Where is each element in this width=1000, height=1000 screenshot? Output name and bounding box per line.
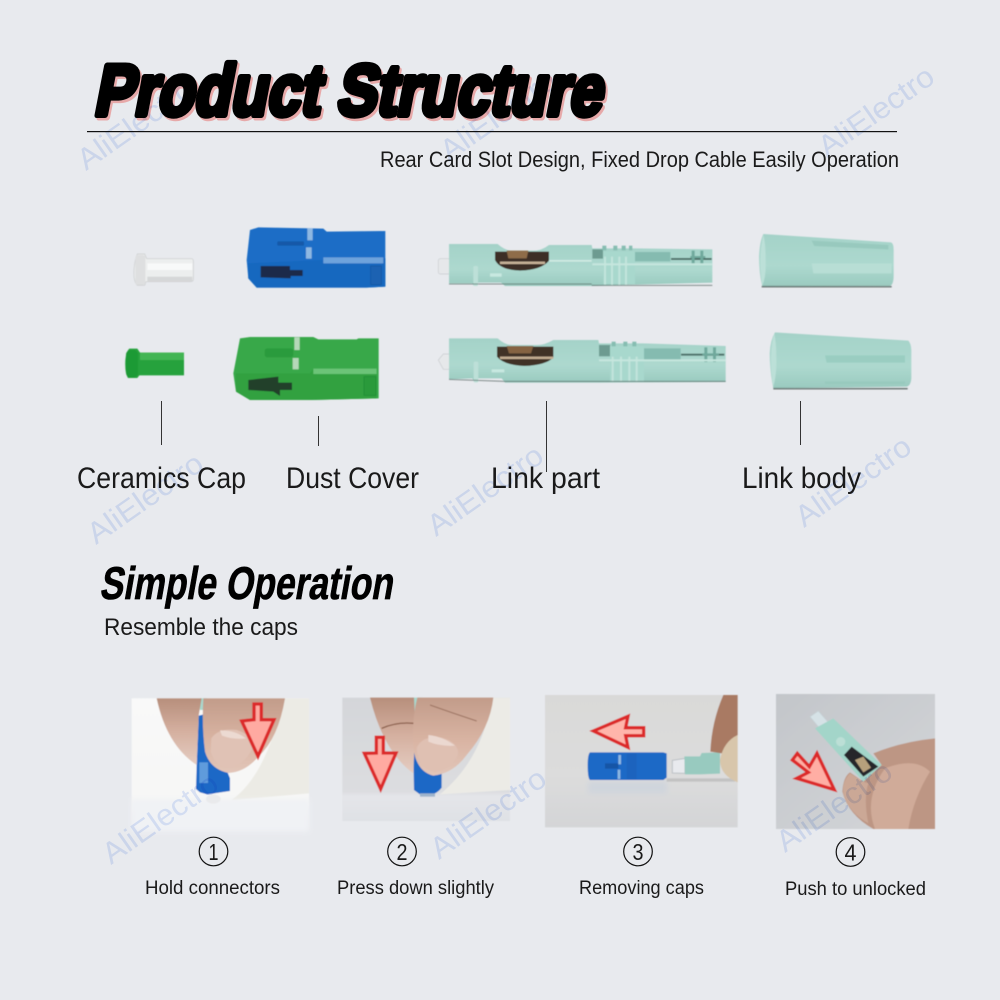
photo 2: press down slightly bbox=[342, 698, 510, 821]
watermarks: AliElectro bbox=[424, 762, 553, 866]
photo 1: hold connectors bbox=[132, 698, 309, 832]
title: Product Structure: Product Structure bbox=[92, 53, 616, 133]
heading: Simple Operation: Simple Operation bbox=[97, 557, 399, 609]
bottom link body bbox=[770, 332, 911, 389]
title: Product Structure: Product Structure bbox=[90, 51, 614, 131]
green dust cover bbox=[233, 337, 379, 400]
title underline bbox=[87, 131, 897, 132]
arrow: down-right bbox=[792, 753, 834, 790]
top link body bbox=[759, 234, 894, 287]
watermarks bbox=[71, 60, 941, 871]
step 4 number: 4 bbox=[844, 840, 857, 866]
watermarks: AliElectro bbox=[789, 430, 918, 534]
arrow: left bbox=[593, 716, 644, 747]
watermarks: AliElectro bbox=[770, 755, 899, 859]
parts: link parts and link bodies bbox=[438, 234, 911, 389]
blue dust cover bbox=[247, 227, 385, 288]
step 2 number bbox=[388, 837, 416, 866]
arrow: down bbox=[364, 737, 396, 789]
step 4 number bbox=[836, 838, 865, 866]
watermarks: AliElectro bbox=[812, 60, 941, 164]
step 1 number bbox=[199, 837, 228, 866]
white ceramics cap bbox=[134, 254, 193, 285]
caption: Press down slightly: Press down slightly bbox=[337, 877, 494, 899]
watermarks: AliElectro bbox=[71, 73, 200, 177]
photo 3: removing caps bbox=[545, 695, 738, 827]
top link part bbox=[438, 244, 712, 286]
step 2 number: 2 bbox=[396, 839, 408, 865]
watermarks: AliElectro bbox=[434, 64, 563, 168]
watermarks: AliElectro bbox=[96, 767, 225, 871]
subheading: Resemble the caps: Resemble the caps bbox=[104, 614, 298, 641]
leader lines bbox=[162, 401, 800, 472]
subtitle: Rear Card Slot Design, Fixed Drop Cable Easily Operation bbox=[380, 147, 899, 172]
photo 4: push to unlocked bbox=[776, 694, 935, 829]
step 3 number: 3 bbox=[632, 839, 644, 865]
watermarks: AliElectro bbox=[421, 439, 550, 543]
arrow: down bbox=[242, 704, 274, 756]
step 3 number bbox=[624, 837, 652, 866]
caption: Removing caps: Removing caps bbox=[579, 877, 704, 899]
green cap bbox=[125, 349, 184, 378]
label: Link body: Link body bbox=[742, 462, 861, 495]
bottom link part bbox=[438, 338, 726, 383]
step 1 number: 1 bbox=[208, 839, 218, 865]
label: Dust Cover: Dust Cover bbox=[286, 462, 419, 495]
watermarks: AliElectro bbox=[81, 447, 210, 551]
caption: Push to unlocked: Push to unlocked bbox=[785, 878, 926, 900]
caption: Hold connectors: Hold connectors bbox=[145, 877, 280, 899]
label: Ceramics Cap: Ceramics Cap bbox=[77, 462, 246, 495]
parts: caps and dust covers bbox=[125, 227, 385, 400]
label: Link part: Link part bbox=[491, 462, 601, 495]
